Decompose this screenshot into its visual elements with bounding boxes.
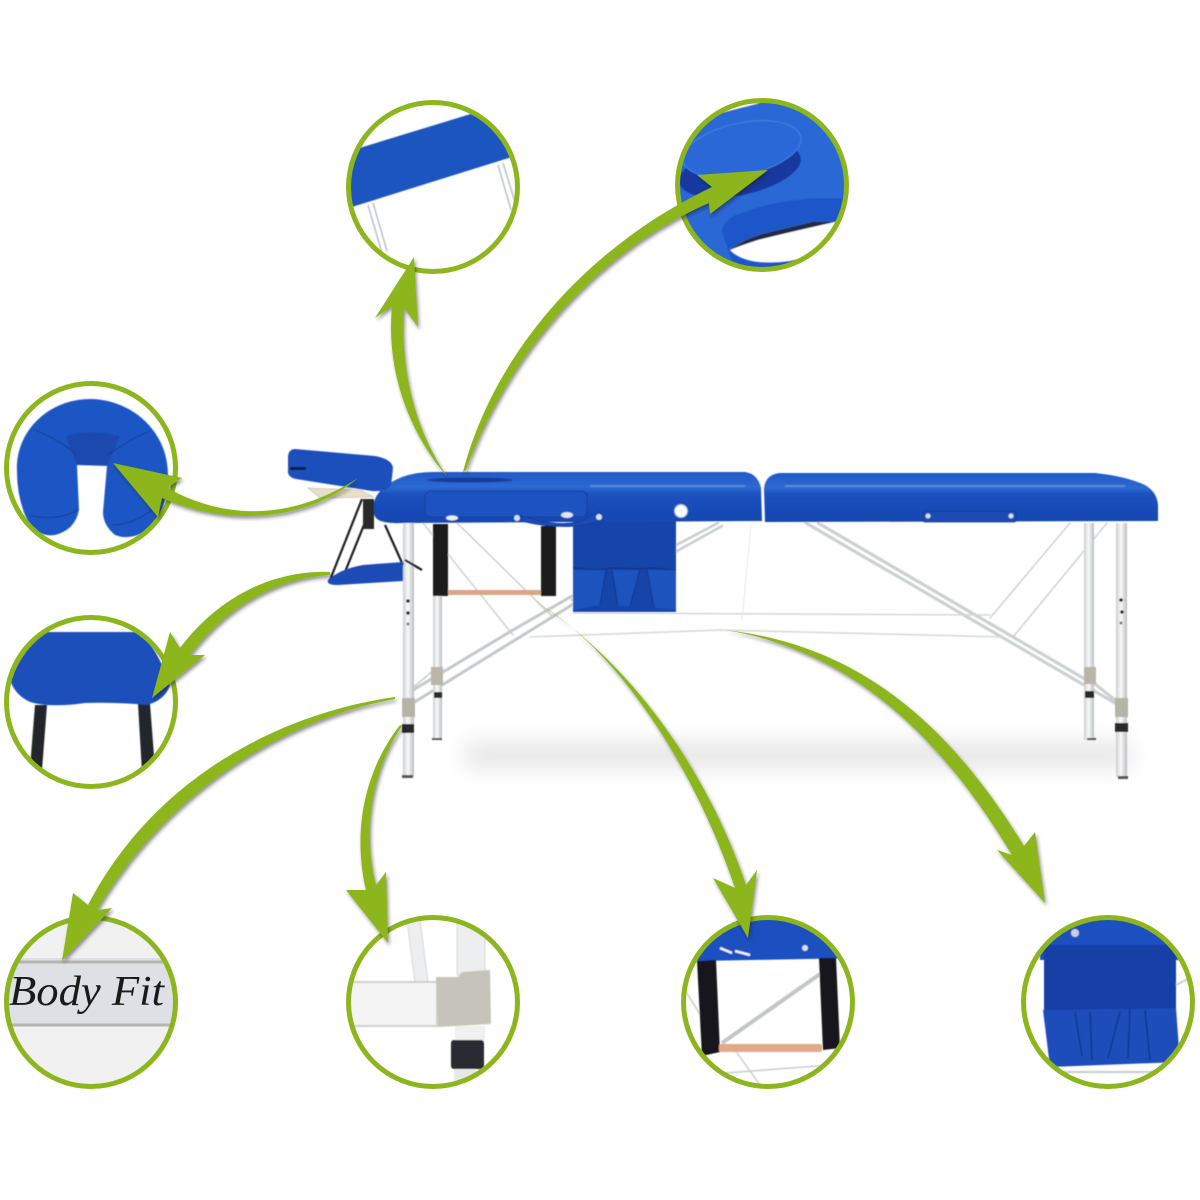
blue pad underside [696,920,838,962]
blue pad edge [351,114,510,208]
straps and wooden bar [433,524,556,596]
cradle cushion [17,399,168,537]
pocket folds [1075,1008,1150,1060]
headrest mount [308,488,374,498]
cradle seams [30,430,158,525]
headrest side slot [290,467,306,470]
arrow: to straps circle [533,600,757,938]
side pocket [573,520,676,612]
arrow: to Body Fit circle [62,697,395,961]
arm rest fittings [446,511,603,527]
detail circle: leg joint [345,918,518,1091]
table edge [1040,918,1180,960]
frame rod [1050,975,1196,1072]
massage table [288,449,1158,779]
pillow side [680,150,802,197]
arrow: to table edge circle [375,257,447,476]
arrow: to pocket circle [725,630,1045,903]
right table pad [764,473,1158,522]
right rear leg [1084,523,1096,740]
face hole lip [722,198,842,267]
arrow: to face cradle circle [113,463,358,517]
upright rods [407,920,485,982]
headrest support struts [330,499,422,580]
brand text: Body Fit [9,969,165,1015]
detail circle: table edge [340,102,525,272]
pillow top [683,120,802,175]
left table pad [374,472,762,523]
support straps [30,704,155,772]
detail circle: headrest [674,100,850,275]
opening shadow [730,222,835,250]
left rear leg [431,596,443,740]
detail circle: pocket [1024,918,1196,1086]
pocket rear [1044,945,1176,1015]
left front leg [402,523,415,778]
detail circle: straps and bar [680,918,860,1086]
leg tip [453,1068,477,1081]
black straps [697,958,840,1056]
pad legs [368,163,516,253]
lower leg [455,1026,485,1042]
arrow: to arm support circle [152,572,330,698]
rivet [1071,929,1079,937]
detail circle: Body Fit logo [5,916,177,1088]
cradle inner recess [66,432,120,465]
plastic bracket [436,970,491,1027]
headrest [288,449,393,491]
aluminium bar [5,958,177,1026]
floor shadow [465,742,1130,768]
rivets [720,948,750,955]
lower arm support [328,562,403,585]
face hole slot [427,478,513,482]
right front leg [1115,523,1128,779]
upper white sliver [722,103,760,114]
arrow: to headrest circle [463,170,768,472]
pad highlight lines [590,485,1125,487]
black collar [451,1040,484,1069]
table frame and wires [404,523,1115,703]
horizontal bar [345,982,437,1026]
bracket [363,499,374,529]
arrow: to leg joint circle [346,725,402,943]
diagonal rod [722,974,820,1043]
bar edges [5,962,177,1025]
face hole opening [730,222,850,262]
white grommet [674,504,688,518]
wooden bar [719,1044,822,1052]
floor lines [686,991,821,1084]
carry handle [923,511,1016,522]
support cushion [10,632,170,705]
detail circle: arm support [6,618,176,786]
arm rest panel [425,491,587,517]
detail circle: face cradle [6,384,176,552]
pocket front [1043,1008,1180,1067]
